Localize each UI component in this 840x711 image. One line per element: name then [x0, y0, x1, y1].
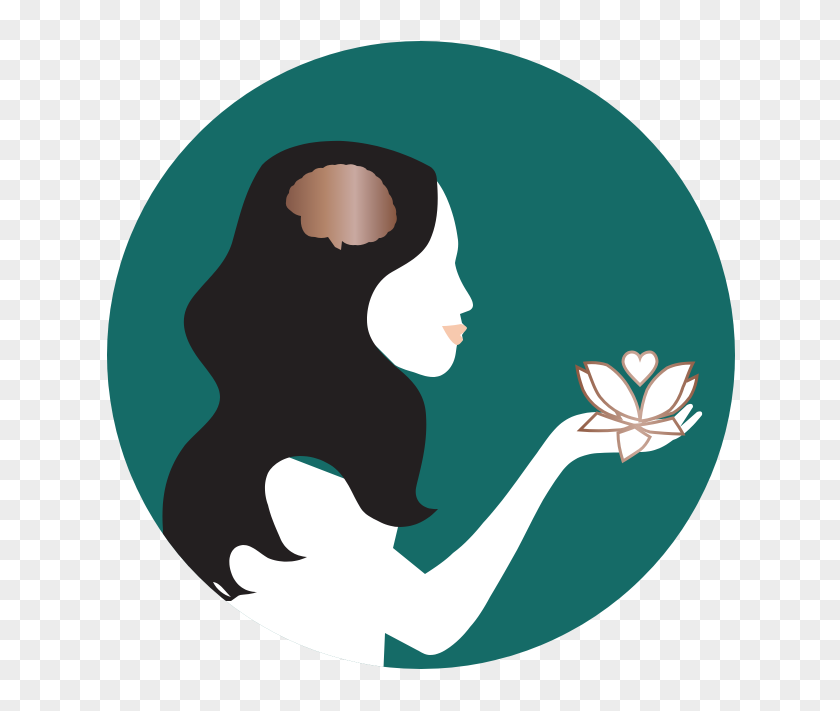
left large petal	[585, 363, 640, 420]
figure clipped to circle	[160, 141, 702, 680]
face	[367, 181, 473, 377]
lower left petal	[580, 413, 633, 431]
left back petal	[577, 367, 620, 418]
lotus flower	[577, 352, 697, 461]
brain	[286, 164, 397, 250]
right back petal	[645, 376, 697, 421]
heart	[623, 352, 657, 385]
bottom petal	[618, 427, 650, 461]
body and arm	[180, 404, 702, 680]
hair	[160, 141, 438, 601]
lips	[442, 324, 467, 345]
teal circle	[107, 41, 735, 669]
right large petal	[640, 363, 693, 421]
lower right petal	[637, 418, 683, 434]
hair highlight sliver	[213, 582, 231, 597]
